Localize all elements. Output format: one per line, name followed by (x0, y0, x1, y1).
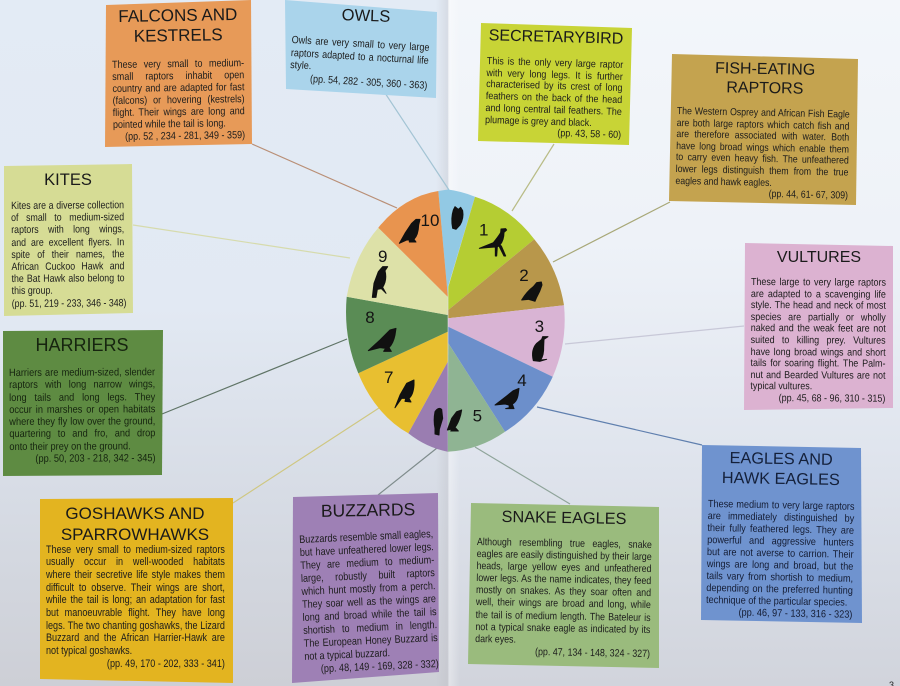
text: and long central tail feathers. The (485, 103, 622, 118)
panel: fish-eating raptors (669, 54, 858, 205)
text: mostly on snakes. As they soar often and (476, 586, 651, 600)
text: eagles and hawk eagles. (675, 175, 772, 188)
text: small raptors inhabit open (112, 69, 244, 82)
text: of small to medium-sized (11, 211, 124, 224)
text: (pp. 51, 219 - 233, 346 - 348) (12, 297, 127, 310)
text: eagles are easily distinguished by their large (476, 549, 651, 563)
heading: SECRETARYBIRD (489, 27, 623, 48)
wedge 6 (408, 362, 448, 452)
text: heads, large yellow eyes and unfeathered (476, 561, 651, 576)
text: flight. Their wings are long and (113, 105, 245, 118)
text: Kites are a diverse collection (11, 199, 124, 212)
wedge 9 (347, 228, 448, 315)
text: (pp. 48, 149 - 169, 328 - 332) (321, 658, 439, 675)
text (706, 500, 854, 620)
wedge numbers: 1 (479, 220, 488, 240)
heading (716, 62, 814, 94)
wedge numbers: 8 (365, 308, 375, 327)
text: These medium to very large raptors (707, 498, 854, 512)
text: to carry even heavy fish. The unfeathered (676, 152, 849, 167)
heading: SPARROWHAWKS (61, 524, 209, 544)
text: tails vary from shortish to medium, (706, 570, 853, 584)
text (12, 200, 126, 310)
text: the tail is of medium length. The Bateleur is (475, 610, 650, 624)
wedge 10 (378, 191, 448, 297)
leader: secretarybird (512, 144, 554, 211)
panel: harriers (3, 330, 163, 476)
panel: falcons and kestrels (105, 0, 252, 147)
text: depending on the preferred hunting (706, 582, 853, 596)
text: Owls are very small to very large (291, 34, 430, 54)
text: not a typical buzzard. (304, 647, 390, 663)
text: raptors with long wings, (11, 224, 124, 236)
panel: vultures (744, 243, 894, 410)
text: well, their wings are broad and long, while (475, 598, 651, 612)
text (46, 545, 225, 670)
text (750, 278, 886, 404)
text: have long broad wings and short (751, 346, 886, 358)
text: These very small to medium- (112, 57, 244, 70)
text (300, 530, 438, 674)
leader: vultures (565, 326, 744, 344)
heading: KITES (44, 171, 92, 189)
wedge numbers: 9 (378, 247, 387, 266)
text: where they fly low over the ground, (9, 415, 155, 428)
text: (falcons) or hovering (kestrels) (113, 93, 245, 106)
text: raptors adapted to a nocturnal life (291, 46, 429, 66)
text (112, 58, 244, 142)
text: The Western Osprey and African Fish Eagle (677, 106, 850, 121)
wedge 2 (448, 239, 564, 318)
panel: secretarybird (478, 23, 632, 146)
panel: eagles and hawk eagles (701, 445, 862, 624)
icon: snake eagle (447, 410, 462, 431)
text: but are not averse to carrion. Their (707, 546, 853, 560)
text (290, 36, 429, 91)
leader: eagles (537, 407, 702, 445)
heading: FALCONS AND (118, 5, 237, 26)
icon: goshawk (395, 380, 414, 408)
text: large, robustly built raptors (301, 567, 435, 585)
text: style. The head and neck of most (751, 300, 886, 312)
leader: buzzards (378, 448, 437, 495)
icon: buzzard (434, 408, 443, 435)
text: This is the only very large raptor (486, 56, 623, 71)
text: are therefore associated with water. Both (676, 129, 849, 144)
text: characterised by its crest of long (486, 79, 622, 94)
wedge numbers: 3 (535, 317, 544, 336)
leader: fish-eating raptors (553, 202, 670, 262)
text: spite of their names, the (11, 248, 124, 261)
wedge numbers: 2 (519, 266, 529, 285)
text: (pp. 49, 170 - 202, 333 - 341) (107, 658, 225, 670)
icon: vulture (533, 337, 548, 361)
text: Harriers are medium-sized, slender (9, 366, 155, 379)
text: feathers on the back of the head (485, 91, 622, 106)
panel: buzzards (292, 493, 439, 683)
text: this group. (12, 285, 53, 297)
text: (pp. 44, 61- 67, 309) (769, 189, 848, 202)
heading: KESTRELS (134, 25, 223, 45)
text: are adapted to a scavenging life (751, 288, 886, 300)
text: which hunt mostly from a perch. (301, 580, 436, 598)
wedge numbers: 4 (517, 371, 527, 390)
icon: owl (452, 207, 463, 229)
text: (pp. 46, 97 - 133, 316 - 323) (738, 607, 852, 620)
text: lower legs distinguish them from the true (676, 164, 849, 178)
text: powerful and aggressive hunters (707, 534, 854, 548)
icon: secretarybird (479, 229, 507, 256)
text: usually occur in well-wooded habitats (46, 556, 225, 568)
text: dark eyes. (475, 634, 516, 646)
text: (pp. 45, 68 - 96, 310 - 315) (779, 393, 885, 405)
text: plumage is grey and black. (485, 114, 592, 129)
text (486, 56, 624, 140)
leader: falcons (252, 144, 397, 208)
wedge 1 (448, 197, 534, 310)
panel: snake eagles (468, 503, 659, 668)
text: (pp. 47, 134 - 148, 324 - 327) (535, 647, 650, 660)
wedge 7 (358, 332, 448, 433)
text: The European Honey Buzzard is (304, 632, 438, 650)
heading: RAPTORS (726, 79, 804, 97)
heading (723, 452, 839, 486)
wedge numbers: 7 (384, 368, 393, 387)
text: These large to very large raptors (751, 277, 886, 289)
text: shortish to medium in length. (303, 619, 437, 637)
text: technique of the particular species. (706, 594, 847, 608)
wedge 3 (448, 305, 565, 377)
wedge numbers (365, 211, 544, 426)
text (676, 106, 850, 201)
text: long tails and long legs. They (9, 391, 155, 404)
leader: harriers (162, 339, 347, 414)
heading (120, 8, 236, 42)
text: but have unfeathered lower legs. (300, 541, 434, 559)
leader: owls (385, 93, 449, 190)
heading: GOSHAWKS AND (65, 504, 205, 522)
text: have long broad wings which enable them (676, 141, 849, 155)
text: nut and Bearded Vultures are not (750, 370, 885, 381)
text: pointed while the tail is long. (113, 117, 226, 130)
text: suited to killing prey. Vultures (751, 335, 886, 347)
text (9, 368, 156, 464)
text: are both large raptors which catch fish and (677, 117, 850, 132)
heading: FISH-EATING (715, 60, 815, 78)
text: They are medium to medium- (300, 554, 435, 572)
panel: kites (4, 164, 133, 316)
text: while the tail is long; an adaptation for fast (46, 594, 225, 606)
text: raptors with long narrow wings, (9, 379, 155, 391)
icon: falcon (399, 219, 420, 243)
text: lower legs. As the name indicates, they feed (476, 574, 651, 588)
text: occur in marshes or open habitats (9, 403, 155, 416)
icon: kite (372, 267, 388, 297)
text: (pp. 54, 282 - 305, 360 - 363) (310, 73, 428, 91)
heading (62, 508, 208, 540)
wedge 4 (448, 327, 553, 432)
text: but manoeuvrable flight. They have long (46, 607, 225, 619)
heading: OWLS (341, 6, 391, 26)
text: African Cuckoo Hawk and (11, 260, 124, 273)
wedge 5 (448, 343, 505, 452)
leader: goshawks (233, 408, 379, 503)
icon: eagle (495, 388, 519, 409)
wedge numbers: 5 (473, 406, 482, 426)
text: quartering to and fro, and drop (9, 428, 155, 440)
leader: snake eagles (475, 447, 570, 504)
text: typical vultures. (750, 381, 812, 393)
leader: kites (133, 225, 350, 258)
wedge 8 (346, 297, 448, 373)
text: These very small to medium-sized raptors (46, 544, 225, 556)
text: tails for soaring flight. The Palm- (751, 358, 886, 370)
heading: HARRIERS (35, 335, 128, 355)
text: the Bat Hawk also belong to (12, 272, 125, 285)
text: are immediately distinguished by (707, 510, 854, 524)
text: where their secretive life style makes them (46, 569, 225, 581)
text: not typical goshawks. (46, 645, 132, 657)
pie wedges (346, 190, 565, 452)
text: legs. The two chanting goshawks, the Lizard (46, 620, 225, 632)
heading: HAWK EAGLES (722, 469, 840, 489)
heading: EAGLES AND (729, 449, 833, 469)
text: naked and the weak feet are not (751, 323, 886, 335)
text: their fully feathered legs. They are (707, 522, 854, 536)
panel: goshawks and sparrowhawks (40, 498, 233, 683)
heading: VULTURES (777, 249, 861, 266)
text: and are excellent flyers. In (11, 236, 124, 249)
panel: owls (285, 0, 437, 98)
text: wings are long and broad, but the (706, 558, 853, 572)
bird silhouettes (368, 207, 548, 435)
text: Buzzards resemble small eagles, (299, 528, 433, 546)
text: with very long legs. It is further (486, 68, 623, 83)
text: not a typical snake eagle as indicated by its (475, 622, 650, 636)
icon: harrier (368, 328, 396, 351)
text: (pp. 52 , 234 - 281, 349 - 359) (125, 129, 245, 142)
text: Buzzard and the African Harrier-Hawk are (46, 632, 225, 644)
text (476, 538, 652, 660)
text: onto their prey on the ground. (9, 440, 131, 453)
heading: BUZZARDS (321, 499, 415, 521)
text: country and are adapted for fast (112, 81, 244, 94)
wedge numbers: 10 (421, 211, 439, 230)
text: They soar well as the wings are (302, 593, 436, 611)
text: (pp. 43, 58 - 60) (557, 128, 621, 141)
wedge: owls (438, 190, 475, 295)
text: Although resembling true eagles, snake (476, 537, 652, 551)
text: (pp. 50, 203 - 218, 342 - 345) (35, 452, 156, 465)
text: difficult to observe. Their wings are short, (46, 582, 225, 594)
text: style. (290, 59, 312, 72)
heading: SNAKE EAGLES (501, 508, 627, 528)
icon: fish-eating raptor (522, 282, 542, 301)
text: long and broad while the tail is (302, 606, 437, 624)
text: species are partially or wholly (751, 312, 886, 323)
